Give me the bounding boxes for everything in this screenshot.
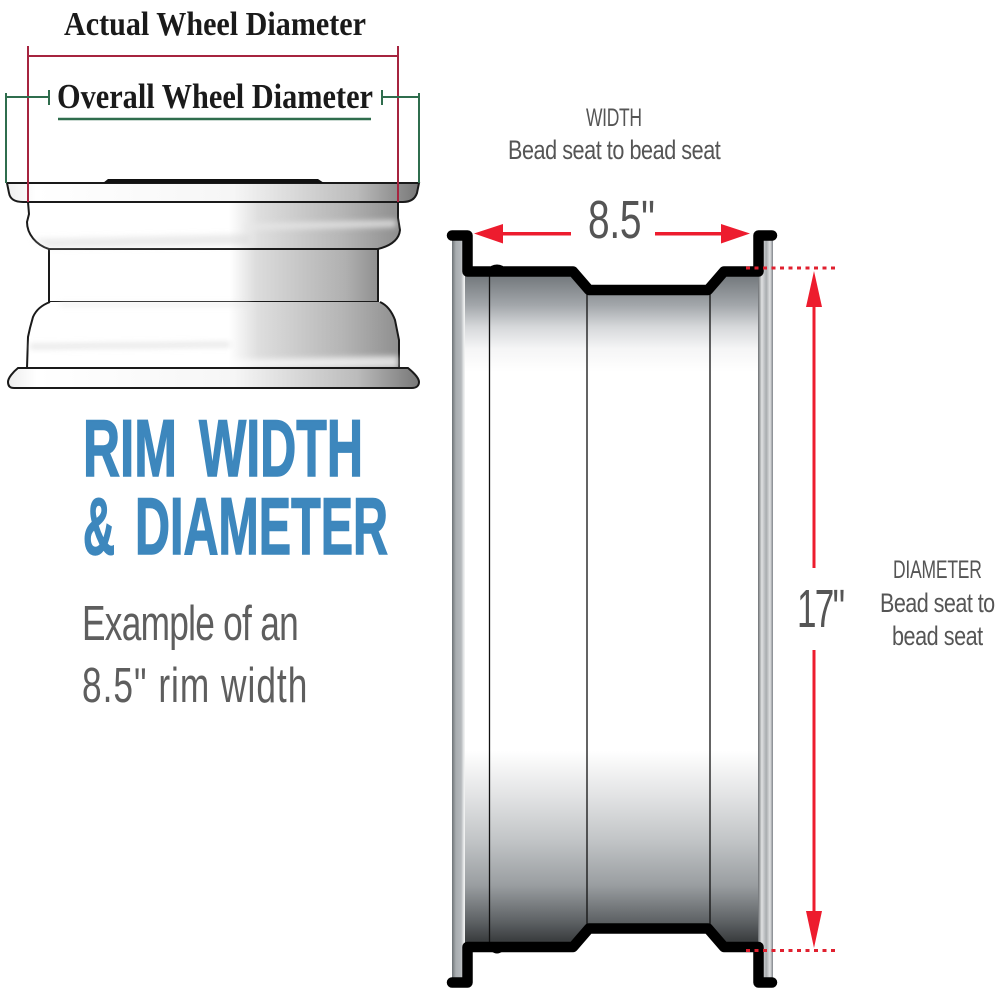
width label: Bead seat to bead seat [508,136,721,166]
width label: WIDTH [586,103,642,132]
subtitle text: Example of an [82,596,299,651]
diameter label [880,555,995,652]
wheel barrel [49,249,378,302]
subtitle text: 8.5" rim width [82,658,307,713]
subtitle text [82,596,307,713]
lower wheel body [27,302,399,368]
left silver lip strip [452,240,465,978]
diameter dimension arrows [806,271,822,948]
title [83,404,388,572]
title: WIDTH [199,404,363,494]
upper wheel body [27,202,400,249]
top profile outline [452,236,772,290]
title: & [83,482,115,572]
title: RIM [83,404,177,494]
top rim flange [7,183,419,202]
interior dividing lines [490,272,710,947]
diameter value: 17" [797,578,845,639]
width dimension arrows [474,224,750,244]
dimension: overall wheel diameter (green) [6,90,419,183]
heading: overall wheel diameter: Overall Wheel Diameter [57,77,373,116]
side view wheel illustration [7,179,419,388]
heading: actual wheel diameter: Actual Wheel Diameter [64,6,366,43]
wheel interior shading [465,272,758,947]
diameter guide lines [746,268,838,950]
diameter label: bead seat [892,622,983,652]
bottom rim flange [8,368,419,388]
diameter label: DIAMETER [893,555,982,584]
cross-section wheel illustration [452,236,773,982]
right silver lip strip [758,240,773,978]
bottom profile outline [452,928,772,982]
wheel highlights [30,220,398,368]
width label [508,103,721,166]
diameter label: Bead seat to [880,589,995,619]
dimension: actual wheel diameter (red) [28,46,398,202]
title: DIAMETER [135,482,388,572]
centre hub edge [103,179,324,183]
width value: 8.5" [588,189,655,249]
